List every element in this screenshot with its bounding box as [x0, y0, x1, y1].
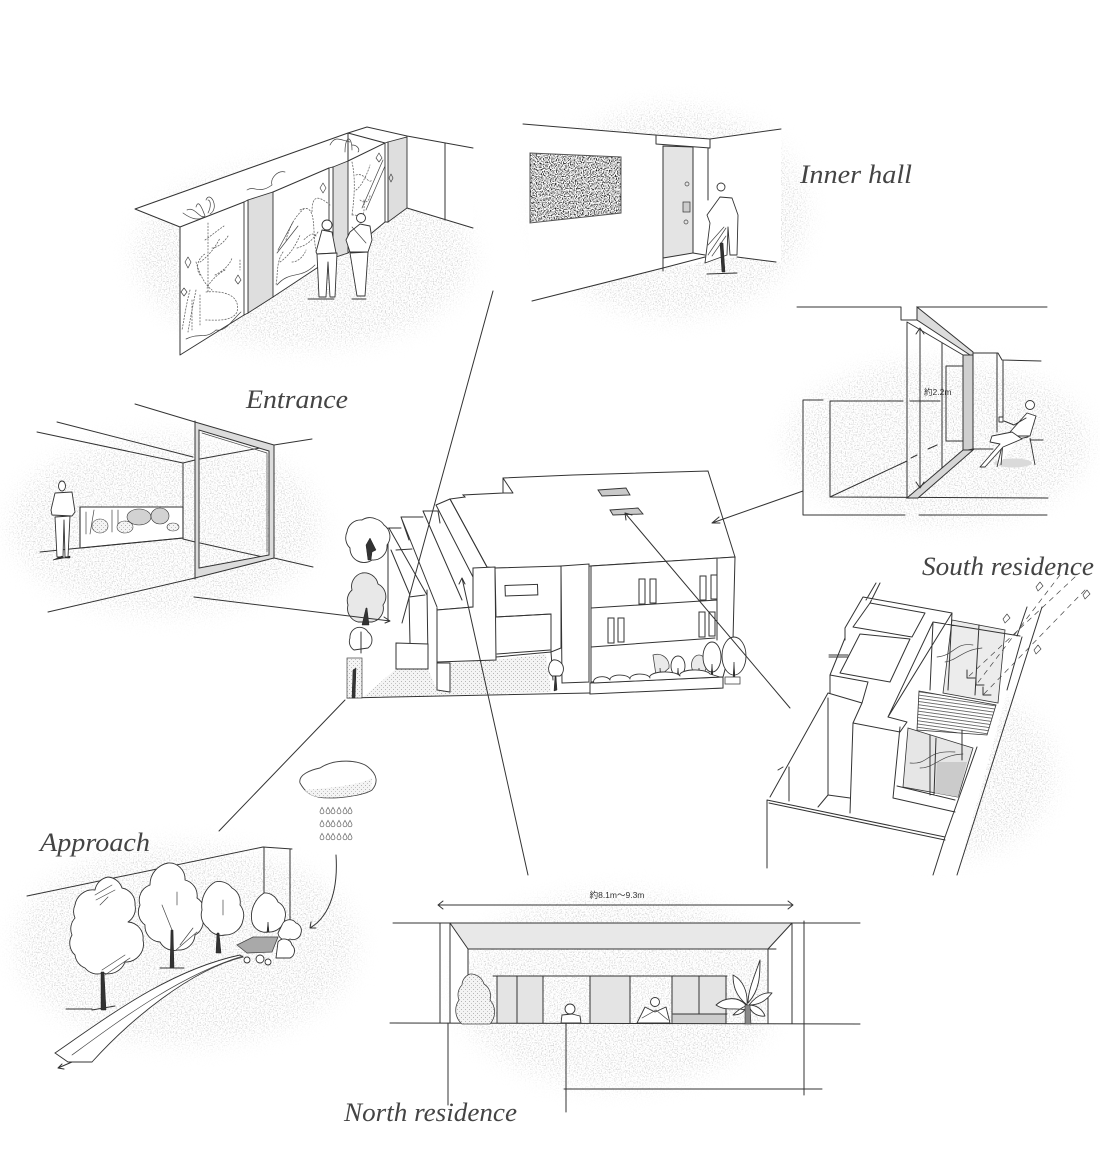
- scene: corner window with standing man: [37, 404, 313, 612]
- label: approach: Approach: [38, 828, 150, 857]
- skylights: [598, 488, 643, 515]
- figure: seated man: [637, 998, 670, 1023]
- leader line: left window to house: [194, 597, 390, 623]
- scene: full-height glazing with seated person: [797, 307, 1048, 515]
- facade volumes: [396, 557, 735, 692]
- leader line: approach to house: [219, 700, 345, 831]
- tree 4 and shrubs: [251, 893, 301, 958]
- window jamb: [963, 355, 973, 451]
- scene: inner hall: [523, 124, 781, 301]
- raindrops: [320, 807, 352, 840]
- height label: 約2.2m: [924, 387, 951, 397]
- scene: north residence section: [390, 890, 860, 1112]
- door: [663, 146, 693, 258]
- width label: 約8.1m～9.3m: [590, 890, 644, 900]
- paved ground: [362, 654, 551, 698]
- leader line: south residence to skylight: [625, 513, 790, 708]
- louvre screen: [917, 691, 996, 735]
- street shrubs: [549, 637, 746, 691]
- figure: standing man: [51, 481, 75, 560]
- palm plant: [716, 960, 772, 1024]
- label: entrance: Entrance: [245, 385, 348, 414]
- label: south residence: South residence: [922, 552, 1094, 581]
- width dimension arrow: [438, 901, 793, 909]
- figure: woman visitor: [308, 220, 337, 299]
- window sill: [907, 450, 973, 498]
- soffit beam: [917, 307, 973, 357]
- height dimension arrow: [916, 328, 924, 488]
- lower window: [903, 728, 973, 797]
- planter: [590, 677, 723, 694]
- wall artwork: [530, 153, 621, 223]
- leader line: entrance to house: [402, 291, 493, 623]
- sunlight dashed rays and arrows: [967, 575, 1090, 695]
- west trees: [346, 518, 390, 698]
- horizontal garden window: [80, 507, 183, 548]
- tree 3: [201, 881, 244, 953]
- label: inner hall: Inner hall: [799, 160, 912, 189]
- terraces and west wing: [388, 478, 513, 690]
- label: north residence: North residence: [343, 1098, 517, 1127]
- windows: [608, 575, 717, 643]
- upper window: [943, 620, 1005, 703]
- figure: person in coat: [705, 183, 738, 274]
- picture frame opening: [195, 421, 274, 579]
- tree 2: [138, 863, 204, 968]
- scene: south residence cutaway: [767, 575, 1090, 875]
- scene: entrance wall with two visitors: [135, 127, 473, 355]
- figure: seated woman: [561, 1004, 581, 1023]
- shrub: [456, 974, 495, 1024]
- wall surfaces: [135, 127, 473, 355]
- garden path: [55, 955, 243, 1062]
- roof: [450, 471, 735, 568]
- rain cloud icon: [300, 761, 376, 928]
- wall surfaces: [523, 124, 781, 301]
- rain runoff arrow: [310, 855, 336, 928]
- bench: [673, 1014, 726, 1024]
- figure: man visitor: [346, 214, 372, 299]
- central house axonometric: [346, 471, 746, 698]
- scene: approach garden path: [27, 847, 301, 1069]
- boulder and stones: [237, 937, 278, 965]
- dotted plant mural: [181, 139, 393, 339]
- figure: seated person with cup: [980, 400, 1036, 468]
- wall lines: [37, 404, 313, 612]
- sliding glass panels: [497, 976, 726, 1023]
- wind swirl marks: [910, 645, 982, 768]
- tree 1: [66, 877, 143, 1010]
- leader line: glazing to house: [712, 491, 803, 523]
- leader line: north residence to house: [459, 578, 528, 875]
- boundary wall: [27, 847, 292, 920]
